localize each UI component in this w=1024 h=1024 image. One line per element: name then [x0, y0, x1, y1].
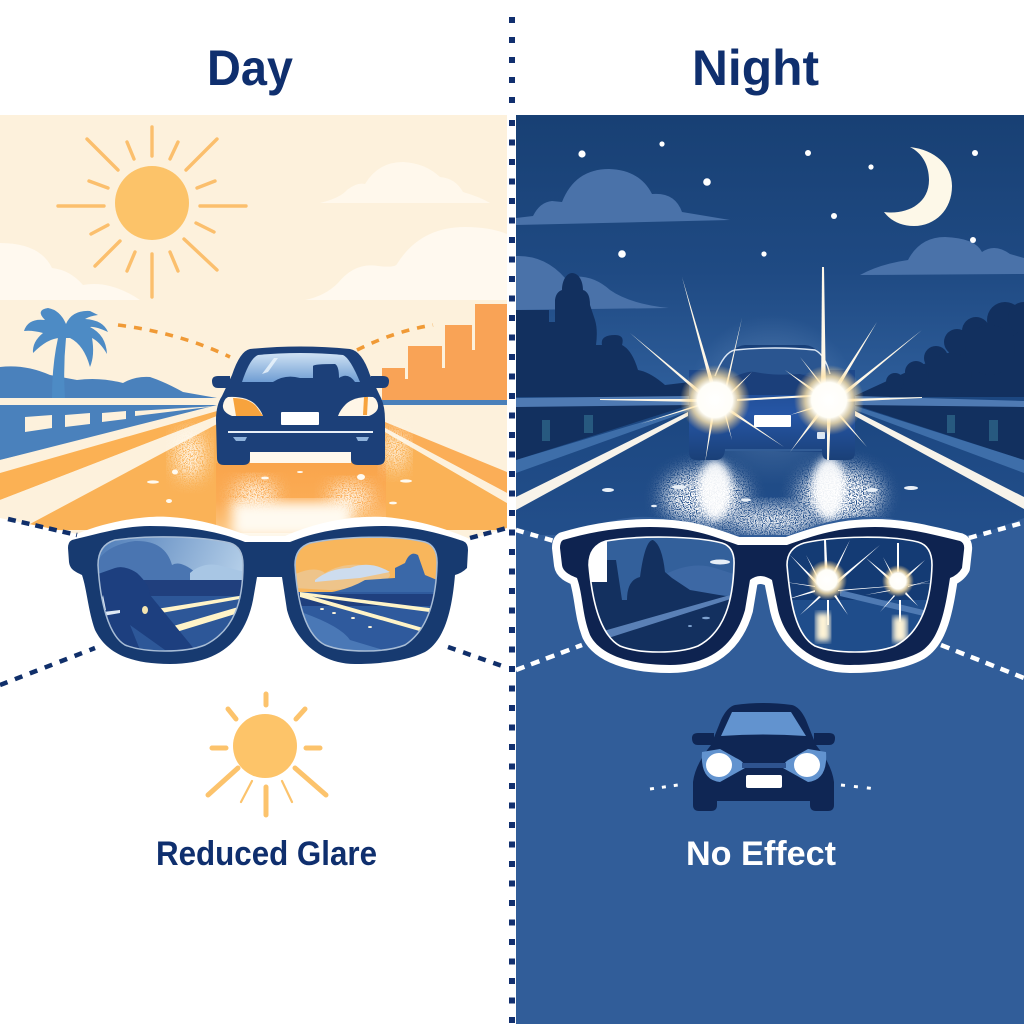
lens glare rays [785, 540, 945, 625]
day sky [0, 115, 507, 540]
day car front view [212, 346, 389, 465]
night car under gap [725, 449, 822, 451]
day car seats [273, 364, 355, 382]
dashed line lower right of day glasses [448, 647, 505, 667]
guard wall right [855, 405, 1024, 460]
label: Reduced Glare: Reduced Glare [156, 835, 377, 873]
night right lens rim [787, 537, 932, 652]
stars [578, 141, 978, 258]
wet road speckle [663, 467, 882, 534]
night sky [516, 115, 1024, 352]
small car mirrors [692, 733, 835, 745]
glare streaks from headlights [600, 267, 922, 463]
cloud upper right [320, 162, 490, 203]
blue waterline [380, 400, 507, 405]
panel: night scene [516, 115, 1024, 540]
night left lens rim [589, 537, 734, 652]
small car plate [746, 775, 782, 788]
distant hills [0, 366, 217, 398]
road sparkle [147, 430, 412, 512]
cloud right [860, 237, 1024, 275]
day car grille line [228, 431, 373, 433]
tree silhouettes left [516, 273, 700, 398]
night car [687, 315, 857, 485]
night car body [689, 345, 855, 460]
road left lanes [0, 456, 18, 460]
road shoulder left [516, 408, 689, 473]
day car under shadow gap [250, 452, 351, 463]
top rail right [855, 396, 1024, 407]
dashed line lower right of night glasses [941, 645, 1024, 678]
day car licence plate [281, 412, 319, 425]
wall panels [542, 415, 998, 441]
dashed line top left of night glasses [516, 530, 554, 541]
white glow below the car [232, 502, 352, 538]
lens reflections [816, 613, 830, 641]
cloud upper left [516, 169, 730, 225]
small car headlight surrounds [702, 749, 826, 782]
icon: reduced glare sun [208, 694, 326, 815]
headlight reflection right [812, 457, 846, 519]
day car fog lights [233, 437, 369, 441]
day right lens rim [295, 537, 437, 651]
cloud left low [516, 256, 669, 310]
night right lens scene [785, 535, 945, 655]
sun with rays [58, 127, 246, 297]
cloud lower right [305, 227, 507, 300]
headlight glow right [794, 365, 864, 435]
small car body [693, 703, 834, 811]
dashed line lower left of night glasses [516, 645, 582, 670]
road shoulder right [855, 406, 1024, 473]
orange city skyline [382, 304, 507, 400]
center dotted divider [508, 17, 516, 1024]
top rail left [516, 396, 690, 407]
label: No Effect: No Effect [686, 835, 836, 873]
right dotted trail [841, 785, 877, 789]
icon: no effect car [650, 703, 877, 811]
road edge line left [516, 412, 688, 510]
dashed line top left of day glasses [8, 519, 77, 535]
day sunglasses [68, 526, 468, 664]
day car windshield [242, 353, 360, 382]
night lower panel [516, 517, 1024, 1024]
small car headlights [706, 753, 732, 777]
night car hood silhouette [725, 372, 825, 395]
day car windshield shine [262, 358, 278, 374]
rail posts [25, 406, 217, 432]
road right cream line [385, 428, 507, 503]
road surface [516, 397, 1024, 540]
cloud left [0, 243, 140, 300]
car reflection on road [216, 463, 386, 533]
headlight glow left [680, 365, 750, 435]
guard wall left [516, 405, 690, 460]
lens lights [807, 560, 847, 600]
dashed line lower left of day glasses [0, 648, 95, 685]
road edge line right [855, 411, 1024, 509]
panel: day scene [0, 115, 507, 540]
panel: night background [516, 115, 1024, 1024]
heading: Night: Night [692, 40, 819, 96]
night car plate [754, 415, 791, 427]
day frame [68, 526, 468, 664]
tree silhouettes right [850, 302, 1024, 398]
guard rail wall [0, 405, 217, 460]
dashed line top right of day glasses [470, 528, 507, 538]
dashed sight line right [357, 325, 433, 350]
day left lens scene [95, 535, 245, 655]
night car windshield outline [715, 348, 830, 376]
small car grille [742, 763, 786, 768]
day left lens rim [98, 537, 243, 651]
night sunglasses [560, 527, 964, 665]
dashed line top right of night glasses [969, 523, 1022, 538]
night left lens scene [587, 535, 737, 655]
night frame [560, 527, 964, 665]
day car headlight right [338, 397, 378, 416]
road right orange lane [385, 422, 507, 493]
day right lens scene [293, 535, 439, 655]
left dotted trail [650, 785, 678, 789]
road main surface [30, 424, 507, 530]
day lower white area [0, 517, 507, 1024]
day car headlight left [223, 397, 263, 416]
palm tree [24, 308, 108, 398]
headlight reflection left [698, 460, 732, 520]
small car windshield [721, 712, 806, 736]
lane dashes [602, 485, 918, 507]
crescent moon [884, 147, 952, 226]
day car mirrors [212, 376, 389, 388]
dashed sight line left [118, 325, 230, 357]
heading: Day: Day [207, 40, 293, 96]
